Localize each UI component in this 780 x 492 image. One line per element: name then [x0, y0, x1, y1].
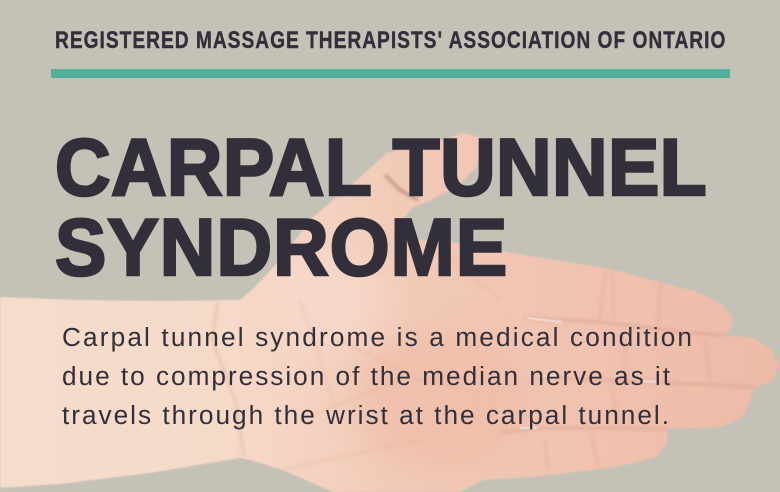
description text: [62, 322, 692, 430]
title: [55, 121, 707, 292]
description text: due to compression of the median nerve as it: [62, 361, 671, 391]
teal divider bar: [51, 69, 730, 78]
title: CARPAL TUNNEL: [55, 121, 707, 212]
description text: travels through the wrist at the carpal tunnel.: [62, 400, 669, 430]
photo: open hand and forearm: [0, 133, 779, 492]
description text: Carpal tunnel syndrome is a medical condition: [62, 322, 692, 352]
finger gap highlights: [520, 318, 658, 428]
header organization name: REGISTERED MASSAGE THERAPISTS' ASSOCIATION OF ONTARIO: [55, 26, 725, 54]
title: SYNDROME: [55, 201, 507, 292]
palm shading: [302, 266, 496, 460]
finger creases and gaps: [212, 175, 755, 470]
